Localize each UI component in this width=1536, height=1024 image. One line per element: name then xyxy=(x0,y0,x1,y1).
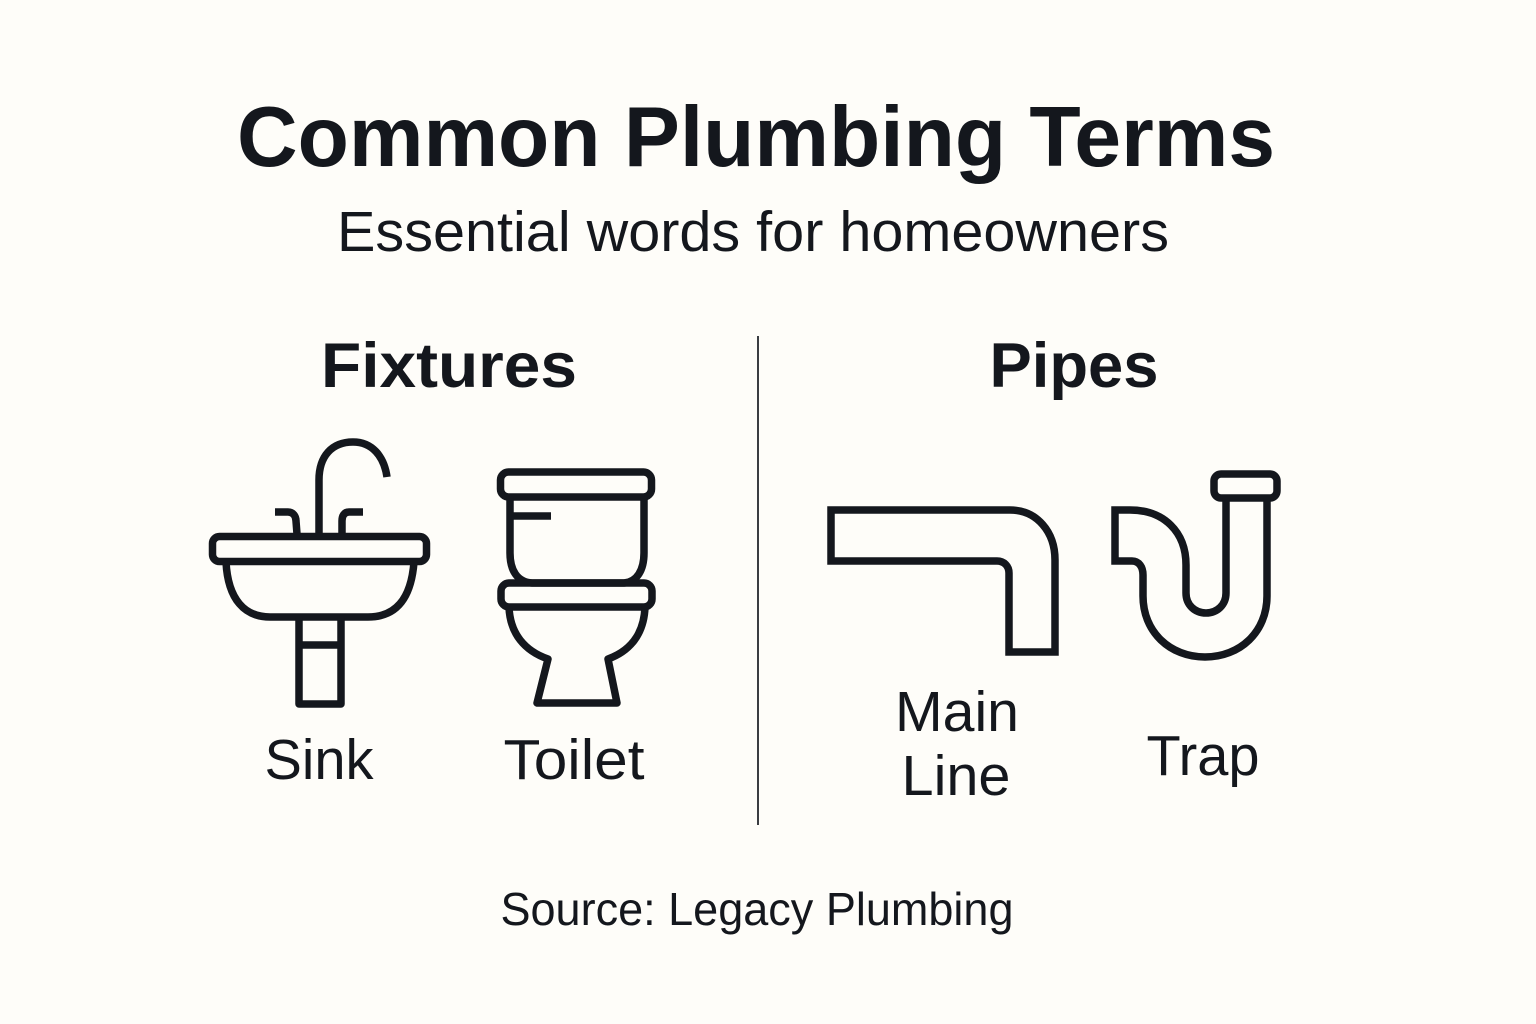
icon: toilet xyxy=(500,472,652,703)
subtitle: Essential words for homeowners xyxy=(337,200,1169,264)
title: Common Plumbing Terms xyxy=(237,90,1275,185)
label: line: Line xyxy=(902,744,1010,808)
heading: fixtures: Fixtures xyxy=(321,331,577,401)
icon: main line pipe xyxy=(831,510,1055,652)
label: toilet: Toilet xyxy=(504,728,645,792)
icon: sink xyxy=(212,442,426,704)
label: sink: Sink xyxy=(264,728,374,792)
heading: pipes: Pipes xyxy=(990,331,1158,401)
label: main: Main xyxy=(895,680,1019,744)
source: Source: Legacy Plumbing xyxy=(500,883,1014,935)
label: trap: Trap xyxy=(1146,724,1260,788)
icon: trap pipe xyxy=(1115,474,1277,657)
